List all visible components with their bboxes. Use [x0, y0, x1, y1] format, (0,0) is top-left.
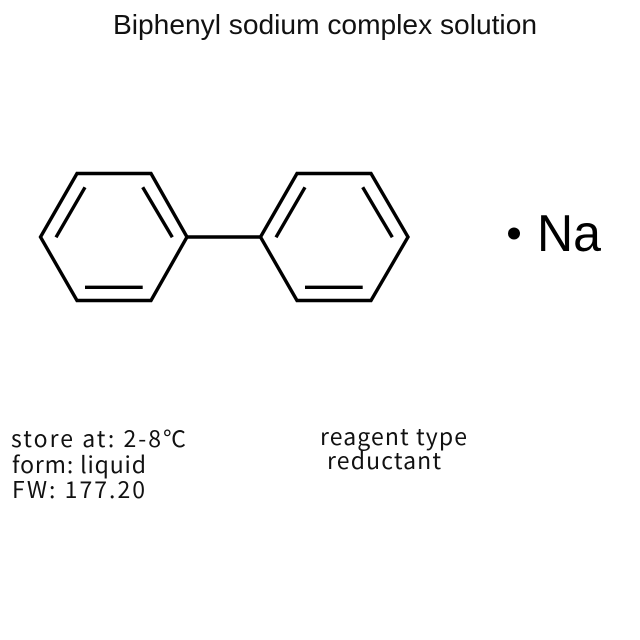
reagent type text block [320, 418, 467, 476]
connecting bond [187, 235, 260, 239]
properties text block [11, 420, 186, 505]
biphenyl structure [40, 174, 408, 300]
sodium label [508, 205, 601, 263]
properties text block: FW: 177.20 [12, 471, 145, 505]
left benzene ring [40, 174, 187, 300]
right benzene ring [260, 174, 408, 300]
reagent type text block: reagent type [320, 418, 467, 452]
title: Biphenyl sodium complex solution [113, 9, 537, 40]
properties text block: store at: 2-8℃ [11, 420, 186, 454]
Na text: Na [537, 205, 601, 263]
reagent type text block: reductant [327, 442, 441, 476]
bullet [508, 228, 520, 240]
properties text block: form: liquid [12, 446, 146, 480]
